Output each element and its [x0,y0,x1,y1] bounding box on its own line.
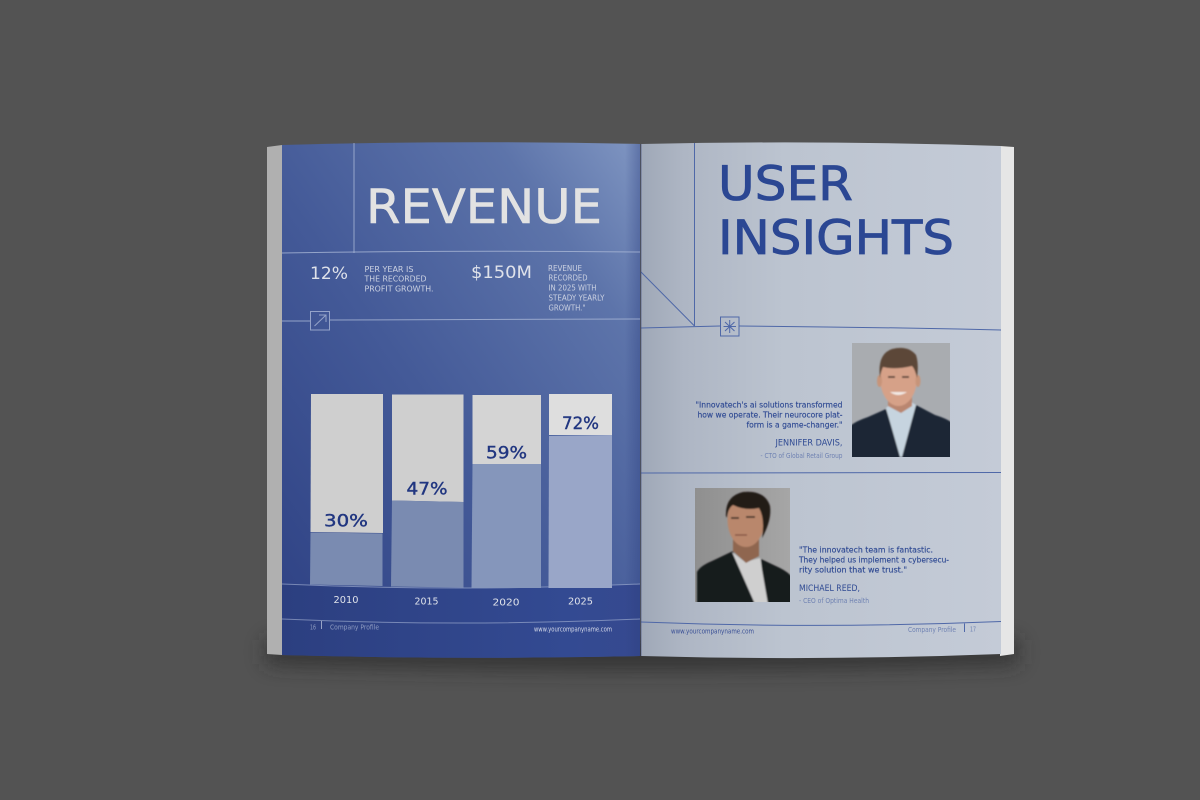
heading: user insights: INSIGHTS [718,211,954,266]
quote: Michael Reed [798,546,949,605]
stat: 12 percent: PROFIT GROWTH. [364,284,434,294]
bar 2020: 59% [486,444,527,464]
heading: revenue: REVENUE [366,180,602,235]
icon: arrow box [310,312,330,330]
panel: right page user insights [641,142,1001,658]
neck [887,397,913,414]
quote: Michael Reed: rity solution that we trust." [799,566,907,574]
quote: Jennifer Davis: - CTO of Global Retail Group [760,452,843,460]
quote: Jennifer Davis: JENNIFER DAVIS, [775,438,842,448]
spine shadow [640,144,642,656]
bar 2010 [310,394,383,586]
footer: right page [671,624,976,636]
footer: right page: www.yourcompanyname.com [671,628,754,636]
year labels: 2020 [492,598,520,608]
neck [732,540,760,564]
quote: Michael Reed: "The innovatech team is fantastic. [799,546,933,554]
eyes and mouth [888,376,909,378]
bar 2025: 72% [562,414,599,434]
footer: left page: www.yourcompanyname.com [534,626,612,634]
icon: asterisk box [720,317,739,336]
photo: Michael Reed portrait [695,488,792,604]
jacket [850,405,952,460]
ears [877,375,882,387]
year labels: 2015 [414,596,438,608]
bar chart [310,394,612,608]
photo: Jennifer Davis portrait [850,343,952,460]
panel: left page revenue [282,142,640,658]
bar 2010: 30% [324,512,368,532]
stat: 12 percent: 12% [310,264,348,284]
shirt [886,398,916,457]
stat: 150M revenue: $150M [471,263,532,283]
year labels: 2025 [568,596,593,608]
grid lines [641,143,1001,625]
footer: left page [310,621,612,634]
quote: Jennifer Davis [696,400,843,460]
stat: 150M revenue [471,263,605,312]
quote: Michael Reed: - CEO of Optima Health [799,597,869,605]
stat: 150M revenue: REVENUE [548,264,582,273]
stat: 150M revenue: STEADY YEARLY [548,294,605,302]
quote: Jennifer Davis: "Innovatech's ai solutions transformed [696,400,842,410]
quote: Michael Reed: MICHAEL REED, [799,584,860,594]
grid lines [282,143,640,623]
bar 2020 [472,395,541,588]
stat: 150M revenue: RECORDED [548,274,588,282]
footer: left page: 16 [310,624,316,632]
face [726,504,764,548]
stat: 12 percent: PER YEAR IS [364,265,414,274]
book shadow [266,640,1018,670]
stat: 150M revenue: IN 2025 WITH [548,284,596,292]
bar 2015: 47% [406,480,448,500]
footer: left page: Company Profile [330,624,379,632]
bar 2025 [548,394,612,588]
footer: right page: 17 [970,626,976,634]
eyes and mouth [731,517,755,518]
hair [880,348,918,378]
quote: Jennifer Davis: form is a game-changer." [746,420,842,430]
page stack: left edge [267,145,282,655]
stat: 12 percent: THE RECORDED [364,274,426,284]
bottom band [282,584,640,658]
stat: 150M revenue: GROWTH." [548,304,586,312]
heading: user insights: USER [718,157,853,212]
face [880,365,917,406]
page stack: right edge [1000,146,1014,656]
bar 2015 [391,394,464,588]
jacket [697,551,792,604]
stat: 12 percent [310,264,434,294]
quote: Michael Reed: They helped us implement a cybersecu- [798,556,949,564]
heading: user insights [718,157,954,266]
quote: Jennifer Davis: how we operate. Their neurocore plat- [698,410,843,420]
footer: right page: Company Profile [908,626,956,634]
hair [726,492,770,538]
year labels [334,595,593,608]
year labels: 2010 [334,595,358,606]
t-shirt [732,552,768,604]
